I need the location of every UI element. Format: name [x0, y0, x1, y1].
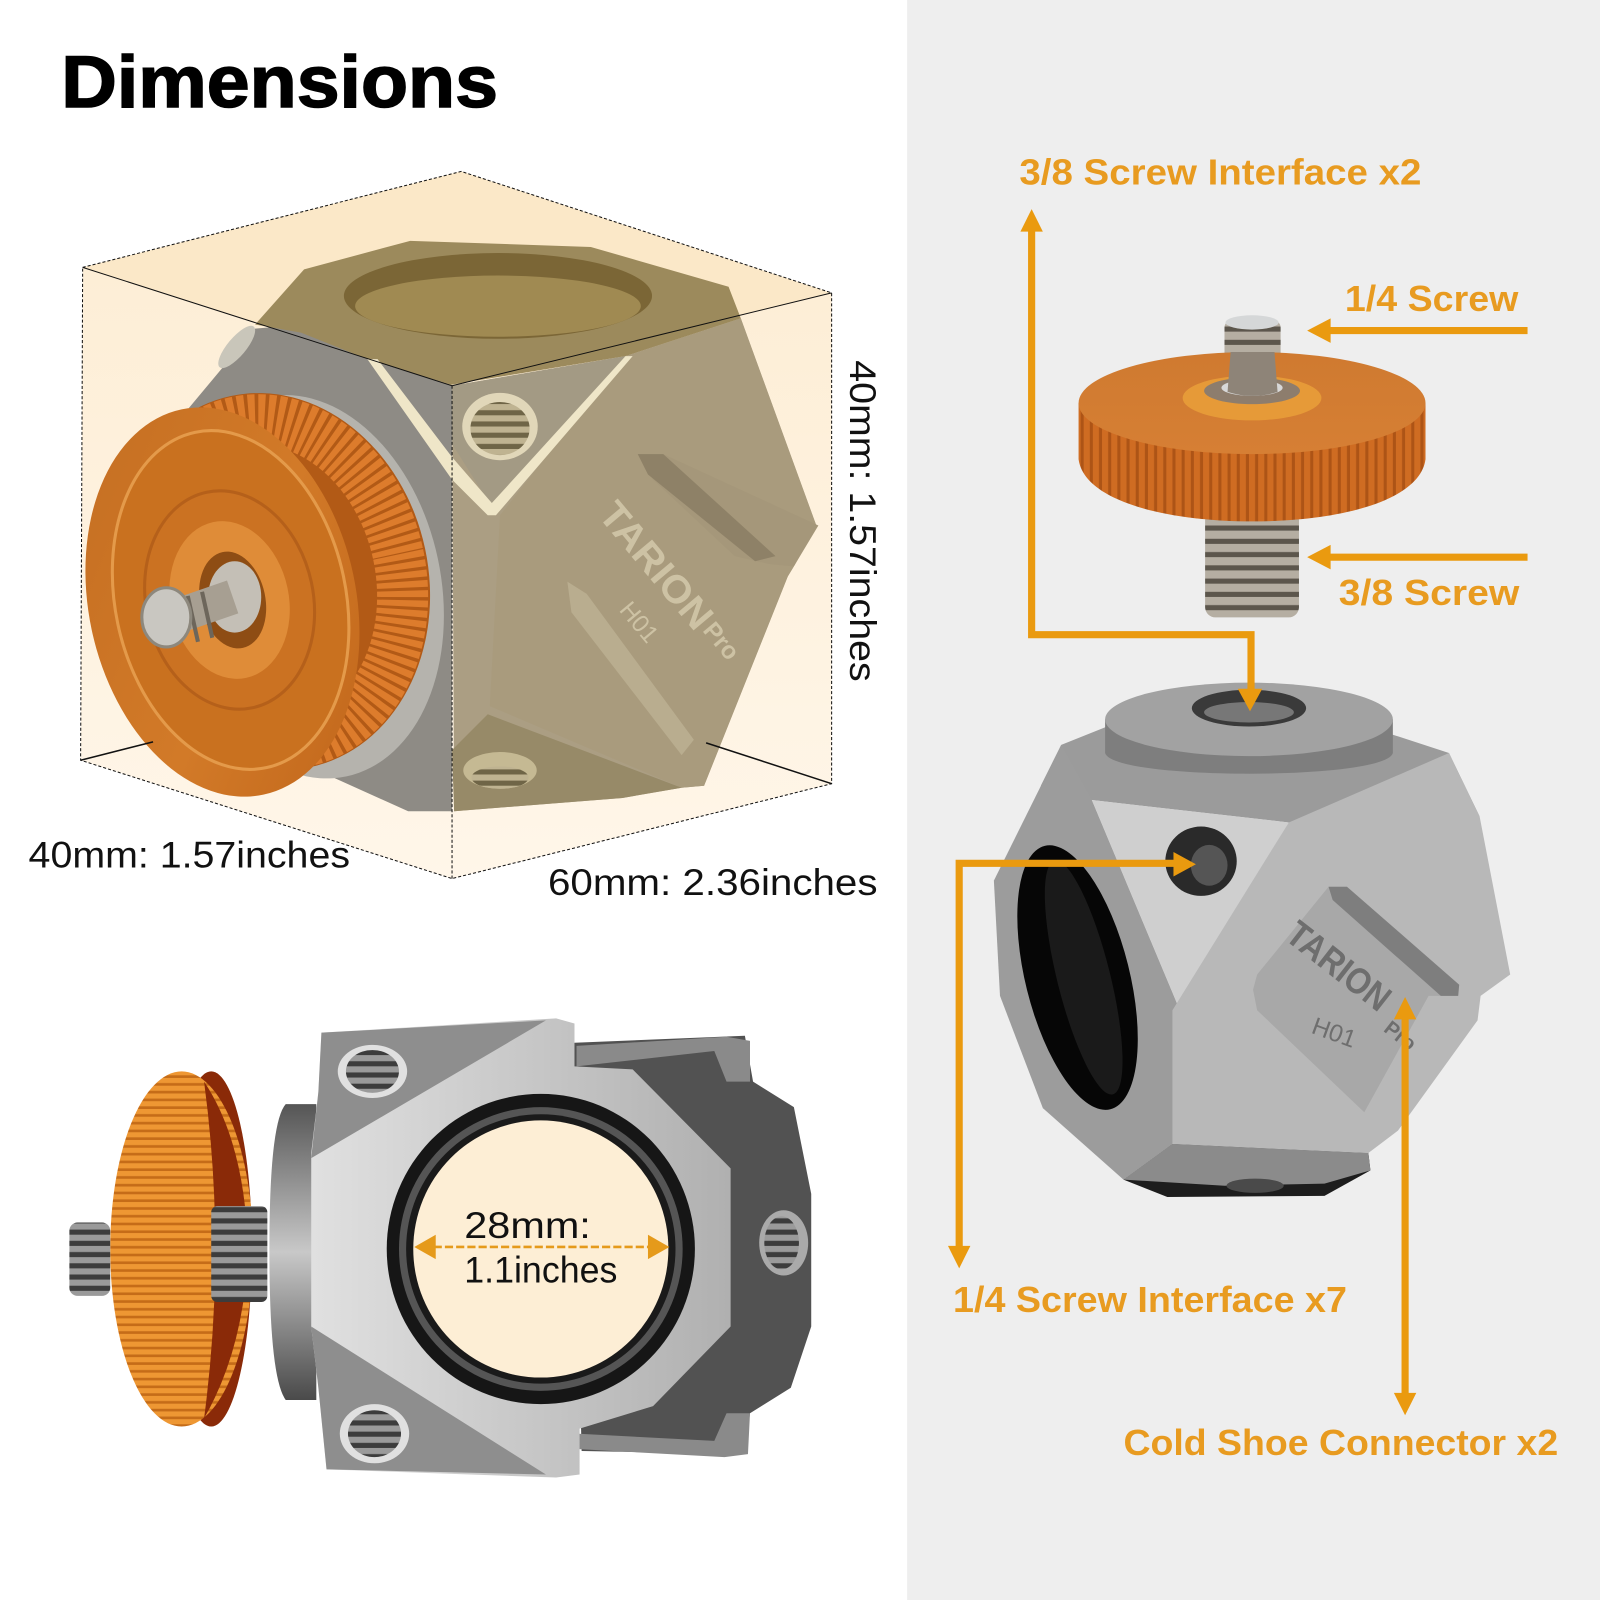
- top 1/4 screw thread: [1224, 320, 1281, 361]
- knob top face: [1079, 352, 1426, 454]
- bottom dark base: [1123, 1144, 1370, 1197]
- gold product body: [189, 241, 818, 811]
- arrow: 3/8 screw interface: [1020, 209, 1262, 711]
- logo text on gold body: Pro: [697, 617, 744, 666]
- logo text on silver body: TARION: [1279, 913, 1399, 1019]
- orange knob: [51, 363, 465, 822]
- dimension label: width: 60mm: 2.36inches: [548, 862, 878, 903]
- bottom hole: [1227, 1179, 1284, 1193]
- diameter label: 1.1inches: [464, 1250, 617, 1291]
- panel: right grey background: [907, 0, 1600, 1600]
- logo text on gold body: TARION: [590, 493, 721, 638]
- screw tip: [1226, 315, 1279, 330]
- side cylinder: [269, 1104, 316, 1400]
- logo text on gold body: [590, 493, 744, 666]
- knob side view: [110, 1071, 253, 1427]
- triangular face: [1092, 800, 1289, 1007]
- box edge lines: [81, 171, 832, 879]
- rubber ring opening: [387, 1094, 695, 1404]
- silver collar behind knob: [134, 369, 478, 804]
- threaded mounting holes: [338, 1045, 808, 1463]
- silver front plate: [311, 1018, 731, 1478]
- arrow: 1/4 screw interface: [948, 852, 1196, 1268]
- arrow: 1/4 screw: [1307, 318, 1528, 343]
- bounding box faces: [81, 171, 832, 879]
- top boss: [1105, 683, 1393, 774]
- arrow: 3/8 screw: [1307, 545, 1528, 569]
- dimension label: depth: 40mm: 1.57inches: [29, 834, 350, 875]
- diameter label: 28mm:: [464, 1205, 591, 1246]
- arrow: cold shoe connector: [1394, 997, 1416, 1415]
- logo text on gold body: H01: [614, 597, 663, 648]
- screw shaft: [1228, 352, 1278, 396]
- large right face: [1172, 753, 1510, 1153]
- label: 3/8 screw: 3/8 Screw: [1339, 573, 1520, 613]
- bottom face: [1123, 1144, 1370, 1186]
- body shoulder: [1041, 727, 1480, 822]
- panel: orange thumb screw: [1079, 315, 1426, 617]
- threaded hole: [1165, 827, 1237, 896]
- knob screw stud: [142, 561, 261, 647]
- cold shoe rails: [577, 1037, 750, 1457]
- label: 3/8 screw interface: 3/8 Screw Interface x2: [1019, 153, 1421, 193]
- dark body behind: [571, 1036, 811, 1454]
- label: 1/4 screw interface: 1/4 Screw Interface x7: [953, 1280, 1347, 1320]
- logo text on silver body: Pro: [1380, 1017, 1420, 1055]
- cold shoe recess: [1253, 887, 1459, 1112]
- panel: front view with inner diameter: [69, 1018, 811, 1478]
- knob knurled side: [1079, 403, 1426, 521]
- knob center recess: [1183, 376, 1321, 420]
- lower 3/8 screw thread: [1205, 510, 1299, 617]
- large opening: [994, 833, 1161, 1122]
- dimension label: height: 40mm: 1.57inches: [842, 360, 883, 682]
- diameter arrow: [414, 1235, 669, 1259]
- label: cold shoe connector: Cold Shoe Connector x2: [1123, 1423, 1558, 1463]
- panel: silver cube product: [994, 683, 1510, 1197]
- screw studs: [69, 1206, 267, 1302]
- heading: Dimensions: Dimensions: [61, 40, 498, 123]
- diameter label: [464, 1205, 617, 1291]
- logo text on silver body: H01: [1308, 1013, 1360, 1054]
- label: 1/4 screw: 1/4 Screw: [1345, 279, 1519, 319]
- upper and lower corner shading: [311, 1020, 546, 1474]
- left octagon face: [994, 745, 1179, 1180]
- panel: bounding box with gold product: [29, 171, 883, 903]
